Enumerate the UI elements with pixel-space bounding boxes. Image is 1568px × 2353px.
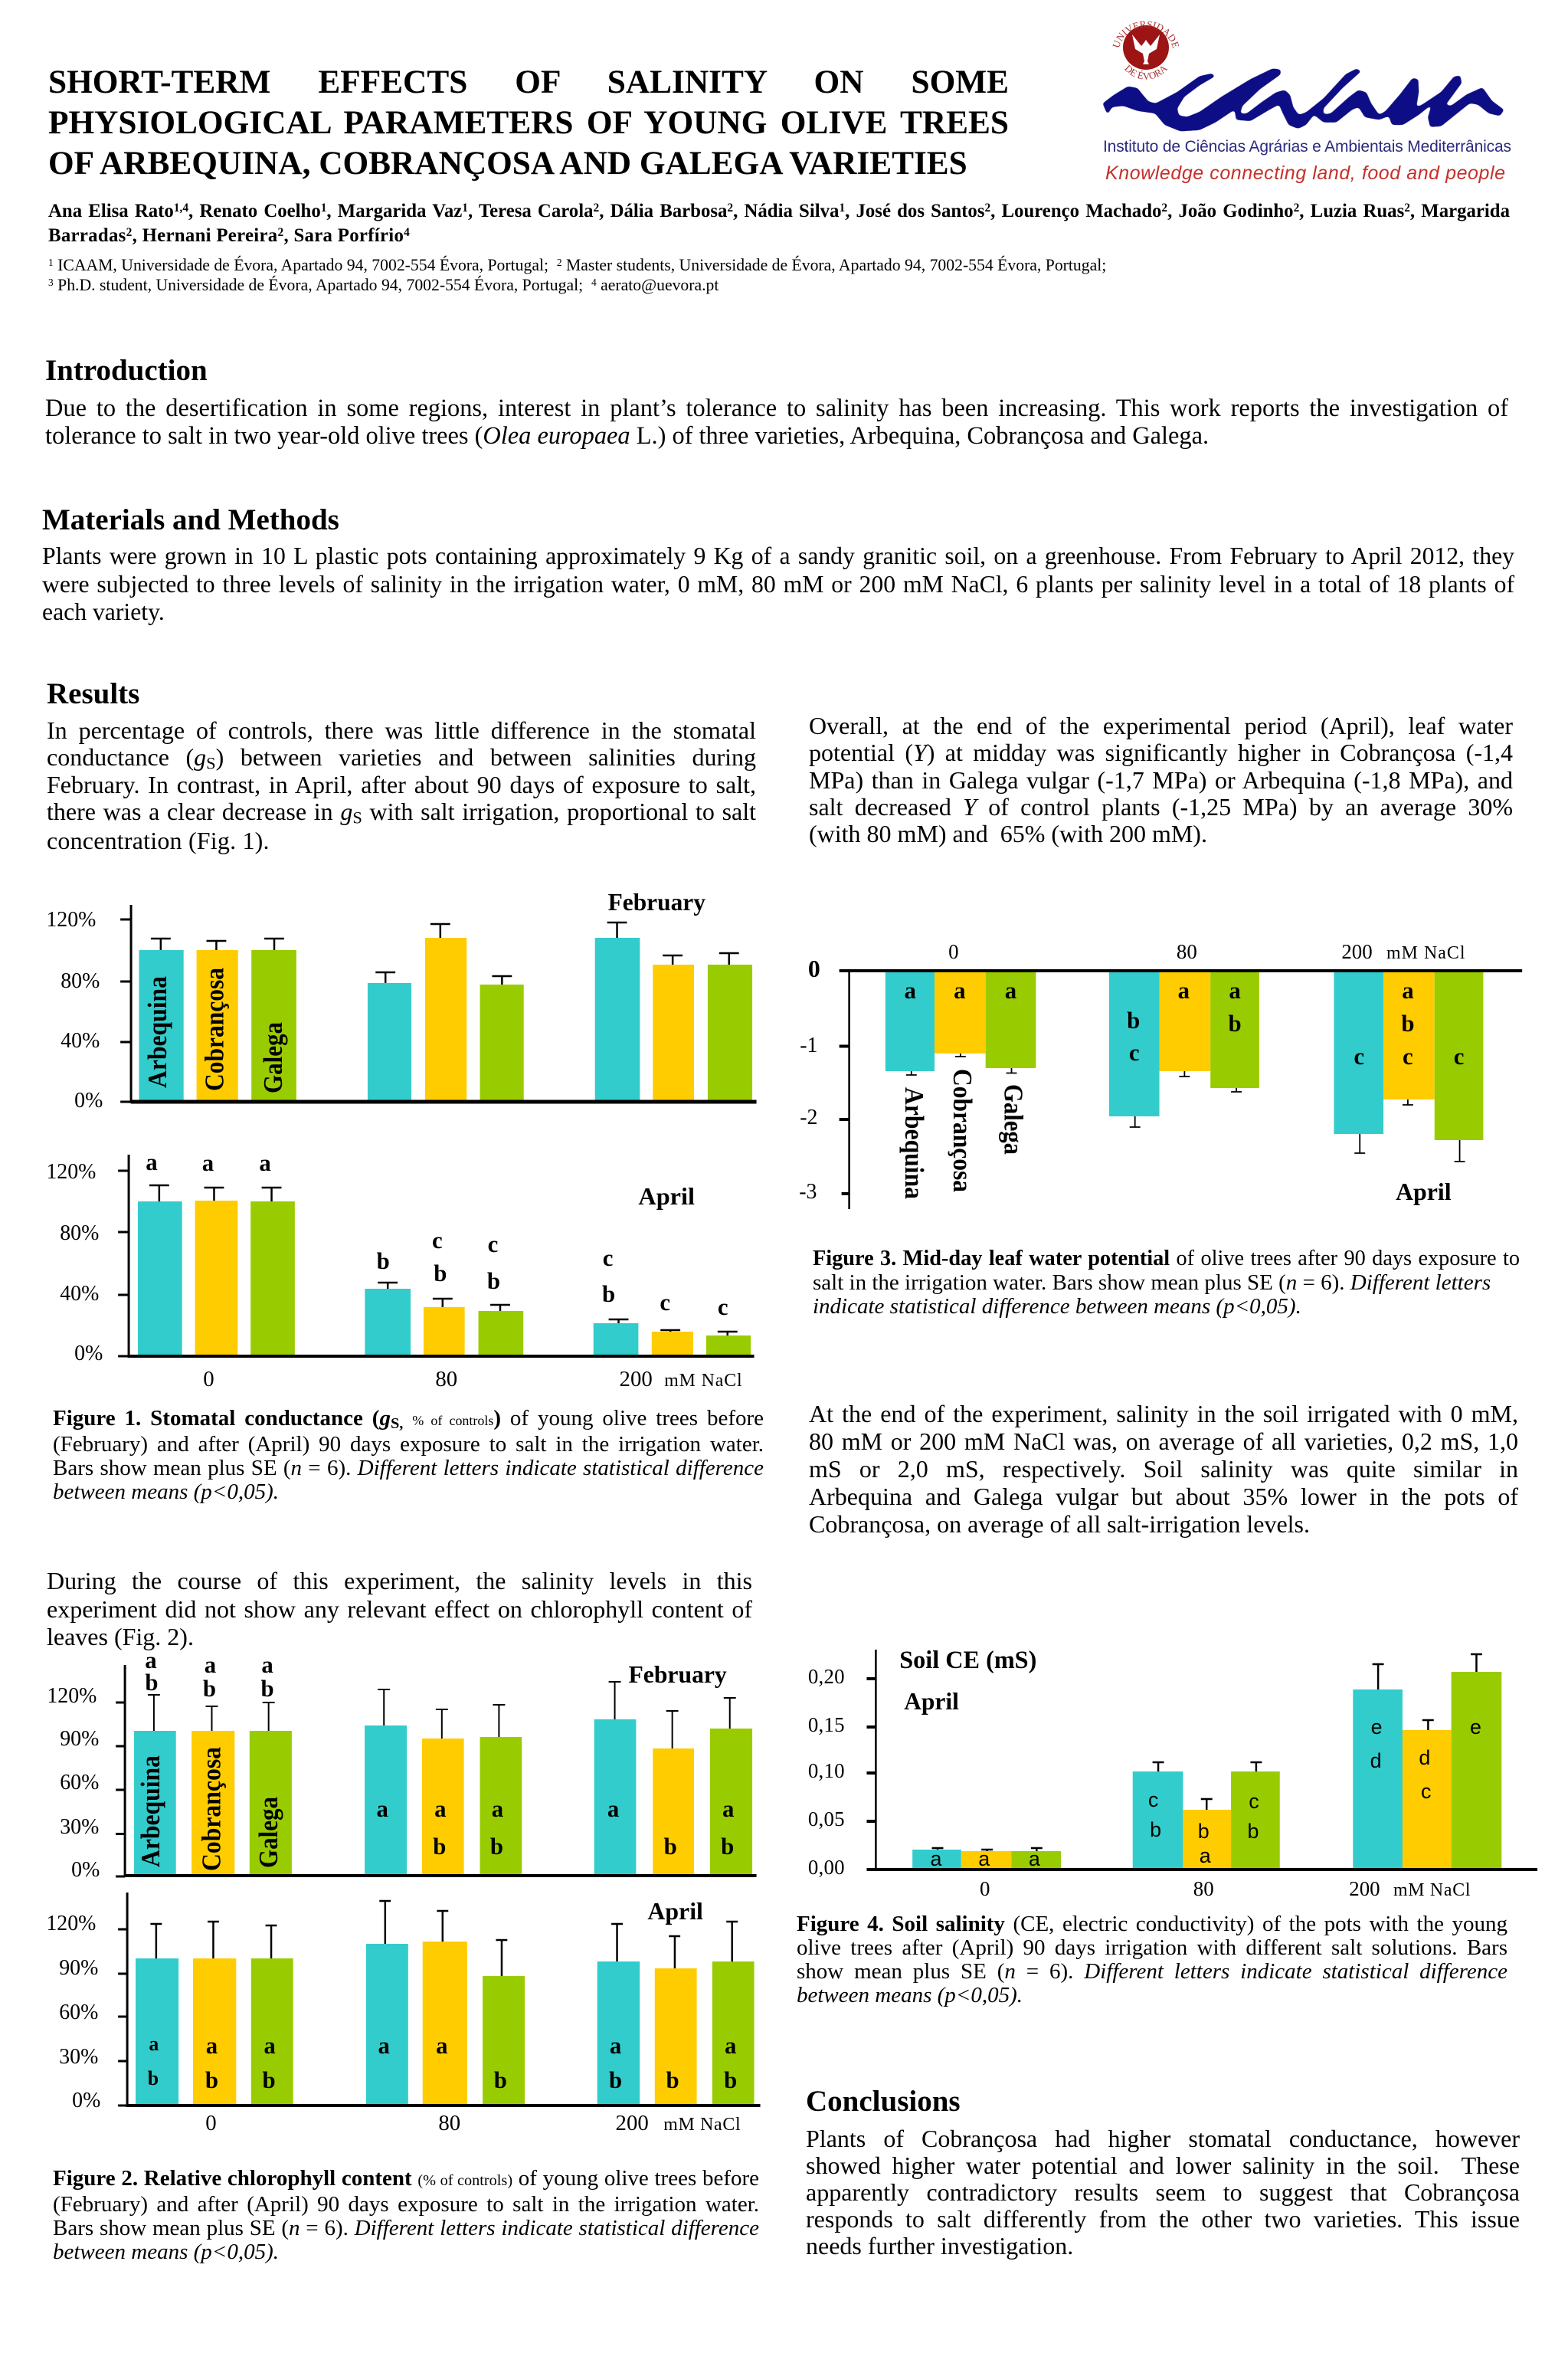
x axis labels: 200 — [1341, 940, 1373, 963]
significance letters — [146, 1149, 728, 1320]
text: soil salinity: At the end of the experiment, salinity in the soil irrigated with 0 mM, — [809, 1400, 1518, 1427]
caption: figure 1: Bars show mean plus SE (n = 6). Different letters indicate statistical difference — [53, 1456, 764, 1480]
caption: figure 1: Figure 1. Stomatal conductance (gS, % of controls) of young olive trees before — [53, 1406, 764, 1432]
logo: ICAAM and Universidade de Évora — [1102, 18, 1511, 184]
text: materials and methods — [42, 542, 1515, 625]
significance letters: c — [1148, 1788, 1158, 1811]
y axis labels: 60% — [59, 2001, 98, 2024]
month label: April — [1396, 1178, 1452, 1205]
icon: icaam wordmark — [1102, 68, 1504, 131]
x axis labels: mM NaCl — [663, 2115, 741, 2135]
y axis labels: 0 — [808, 955, 820, 982]
text: results stomatal conductance: there was a clear decrease in gS with salt irrigation, proportional to salt — [47, 798, 756, 827]
significance letters: b — [1228, 1010, 1242, 1037]
y axis labels: 40% — [61, 1029, 100, 1053]
y axis labels: 0% — [71, 1858, 100, 1882]
text: results water potential: salt decreased Y of control plants (-1,25 MPa) by an average 30% — [809, 793, 1513, 821]
text: conclusions: apparently contradictory results seem to suggest that Cobrançosa — [806, 2178, 1520, 2206]
significance letters: c — [1249, 1790, 1259, 1813]
x axis labels: 80 — [1193, 1877, 1214, 1900]
x axis labels: 200 — [616, 2111, 649, 2135]
heading: conclusions: Conclusions — [806, 2085, 961, 2118]
bars — [134, 1719, 752, 1874]
significance letters: b — [145, 1669, 158, 1696]
x axis labels — [203, 1367, 742, 1391]
text: materials and methods: were subjected to three levels of salinity in the irrigation water, 0 mM, 80 mM or 200 mM NaCl, 6 plants per salinity level in a total of 18 plants of — [42, 570, 1514, 598]
variety labels: Cobrançosa — [196, 1747, 226, 1871]
axes — [120, 905, 131, 1103]
y axis labels — [799, 955, 820, 1204]
x axis labels: 0 — [980, 1877, 990, 1900]
x axis labels — [948, 940, 1465, 963]
significance letters: b — [721, 1833, 734, 1860]
y axis labels — [47, 1684, 100, 1882]
significance letters: b — [205, 2066, 218, 2093]
month label: April — [638, 1183, 695, 1210]
text: materials and methods: Plants were grown in 10 L plastic pots containing approximately 9 Kg of a sandy granitic soil, on a greenhouse. From February to April 2012, they — [42, 542, 1514, 569]
significance letters: a — [904, 977, 916, 1004]
significance letters: a — [610, 2032, 621, 2059]
chart title: Soil CE (mS) — [899, 1647, 1036, 1674]
caption: figure 1: between means (p<0,05). — [53, 1480, 279, 1504]
significance letters: b — [664, 1833, 677, 1860]
icon: university seal: DE ÉVORA — [1124, 64, 1167, 80]
y axis labels: 0,20 — [808, 1665, 845, 1688]
significance letters: d — [1419, 1746, 1430, 1769]
significance letters: b — [203, 1675, 216, 1702]
authors: Barradas2, Hernani Pereira2, Sara Porfírio4 — [48, 225, 410, 246]
y axis labels: 0,05 — [808, 1807, 845, 1830]
text: results water potential — [809, 712, 1513, 847]
caption: figure 4: olive trees after (April) 90 days irrigation with different salt solutions. Bars — [797, 1935, 1507, 1960]
y axis labels: 120% — [47, 1684, 97, 1708]
significance letters: b — [666, 2066, 679, 2093]
significance letters — [931, 1716, 1481, 1870]
month label: February — [608, 889, 705, 916]
month label: April — [647, 1898, 703, 1925]
y axis labels: 120% — [46, 1160, 96, 1184]
x axis labels: 200 — [1349, 1877, 1380, 1900]
significance letters: b — [1247, 1820, 1259, 1843]
text: results water potential: potential (Y) at midday was significantly higher in Cobrançosa (-1,4 — [809, 739, 1513, 766]
text: results water potential: MPa) than in Galega vulgar (-1,7 MPa) or Arbequina (-1,8 MPa), and — [809, 766, 1513, 794]
y axis labels: 120% — [46, 1912, 96, 1935]
text: introduction — [45, 395, 1509, 450]
significance letters: a — [149, 2033, 159, 2055]
caption: figure 4: Figure 4. Soil salinity (CE, electric conductivity) of the pots with the young — [797, 1912, 1507, 1936]
caption: figure 3 — [813, 1247, 1520, 1319]
significance letters: a — [377, 1795, 388, 1822]
text: results stomatal conductance: concentration (Fig. 1). — [47, 827, 270, 854]
x axis labels: 0 — [948, 940, 959, 963]
significance letters: b — [262, 2066, 276, 2093]
significance letters: a — [1200, 1844, 1211, 1867]
caption: figure 2: Figure 2. Relative chlorophyll content (% of controls) of young olive trees before — [53, 2166, 759, 2191]
caption: figure 3: Figure 3. Mid-day leaf water potential of olive trees after 90 days exposure to — [813, 1247, 1520, 1270]
affiliations: 3 Ph.D. student, Universidade de Évora, Apartado 94, 7002-554 Évora, Portugal; 4 aerato@uevora.pt — [48, 276, 719, 294]
significance letters: b — [494, 2066, 507, 2093]
axes — [118, 1155, 129, 1358]
significance letters: c — [718, 1293, 728, 1320]
significance letters: c — [660, 1289, 670, 1316]
caption: figure 4: show mean plus SE (n = 6). Different letters indicate statistical difference — [797, 1959, 1507, 1984]
significance letters: a — [1029, 1847, 1040, 1870]
x axis labels: 80 — [1177, 940, 1197, 963]
variety labels: Cobrançosa — [199, 968, 229, 1091]
text: results water potential: (with 80 mM) and 65% (with 200 mM). — [809, 820, 1207, 847]
y axis labels — [46, 1160, 103, 1365]
y axis labels: 0,10 — [808, 1759, 845, 1782]
chart: figure 2 April — [46, 1893, 761, 2135]
significance letters: c — [1354, 1043, 1364, 1070]
significance letters: b — [609, 2066, 622, 2093]
y axis labels: 120% — [46, 908, 96, 932]
significance letters: b — [1198, 1820, 1210, 1843]
significance letters: a — [259, 1149, 271, 1176]
caption: figure 3: indicate statistical difference between means (p<0,05). — [813, 1294, 1301, 1319]
chart: figure 2 February — [47, 1647, 757, 1882]
text: tagline: Knowledge connecting land, food and people — [1105, 162, 1505, 184]
significance letters: d — [1370, 1749, 1382, 1772]
text: materials and methods: each variety. — [42, 598, 165, 625]
x axis labels: 0 — [203, 1367, 214, 1391]
y axis labels: 90% — [59, 1956, 98, 1980]
significance letters: c — [1129, 1039, 1140, 1066]
variety labels: Galega — [258, 1022, 288, 1093]
x axis labels: 80 — [435, 1367, 457, 1391]
significance letters: a — [206, 2032, 218, 2059]
significance letters: c — [603, 1244, 613, 1271]
bars — [912, 1672, 1501, 1868]
icon: university seal — [1110, 18, 1182, 82]
title: OF ARBEQUINA, COBRANÇOSA AND GALEGA VARIETIES — [48, 145, 967, 182]
significance letters: a — [954, 977, 966, 1004]
caption: figure 2 — [53, 2166, 759, 2264]
y axis labels: -2 — [800, 1106, 817, 1129]
text: conclusions — [806, 2125, 1520, 2260]
text: conclusions: needs further investigation. — [806, 2232, 1073, 2260]
y axis labels: 30% — [59, 2045, 98, 2069]
text: soil salinity: mS or 2,0 mS, respectively. Soil salinity was quite similar in — [809, 1455, 1518, 1483]
y axis labels: 90% — [60, 1727, 99, 1751]
text: institute name: Instituto de Ciências Agrárias e Ambientais Mediterrânicas — [1103, 138, 1511, 156]
text: results stomatal conductance: February. In contrast, in April, after about 90 days of exposure to salt, — [47, 771, 756, 798]
significance letters: c — [432, 1227, 443, 1254]
x axis labels: 0 — [205, 2111, 217, 2135]
significance letters — [148, 2032, 737, 2093]
authors: Ana Elisa Rato1,4, Renato Coelho1, Margarida Vaz1, Teresa Carola2, Dália Barbosa2, Nádia Silva1, José dos Santos2, Lourenço Machado2, João Godinho2, Luzia Ruas2, Margarida — [48, 201, 1510, 221]
y axis labels: 60% — [60, 1771, 99, 1794]
significance letters: a — [261, 1651, 273, 1678]
significance letters: a — [264, 2032, 276, 2059]
affiliations: 1 ICAAM, Universidade de Évora, Apartado 94, 7002-554 Évora, Portugal; 2 Master students, Universidade de Évora, Apartado 94, 7002-554 Évora, Portugal; — [48, 256, 1106, 274]
text: soil salinity: Cobrançosa, on average of all salt-irrigation levels. — [809, 1510, 1310, 1538]
y axis labels: -1 — [800, 1034, 817, 1057]
heading: introduction: Introduction — [45, 354, 208, 387]
y axis labels: 80% — [60, 1221, 99, 1245]
text: soil salinity: 80 mM or 200 mM NaCl was, on average of all varieties, 0,2 mS, 1,0 — [809, 1427, 1518, 1455]
chart: figure 1 February — [46, 889, 757, 1113]
text: soil salinity: Arbequina and Galega vulgar but about 35% lower in the pots of — [809, 1483, 1518, 1510]
error bars — [906, 1054, 1465, 1162]
month label: April — [904, 1688, 959, 1715]
x axis labels: 200 — [620, 1367, 653, 1391]
variety labels — [899, 1069, 1028, 1199]
variety labels: Arbequina — [142, 976, 172, 1088]
text: chlorophyll: experiment did not show any relevant effect on chlorophyll content of — [47, 1595, 752, 1623]
text: chlorophyll: During the course of this experiment, the salinity levels in this — [47, 1567, 752, 1594]
significance letters: a — [492, 1795, 503, 1822]
significance letters: b — [724, 2066, 737, 2093]
y axis labels — [46, 1912, 100, 2112]
significance letters: a — [378, 2032, 390, 2059]
significance letters: a — [434, 1795, 447, 1822]
text: conclusions: showed higher water potential and lower salinity in the soil. These — [806, 2151, 1520, 2179]
y axis labels: 0,15 — [808, 1713, 845, 1736]
variety labels: Arbequina — [136, 1755, 165, 1867]
error bars — [148, 1682, 736, 1748]
text: chlorophyll — [47, 1567, 752, 1650]
significance letters: a — [202, 1149, 214, 1176]
significance letters: a — [725, 2032, 736, 2059]
affiliations — [48, 256, 1106, 294]
text: soil salinity — [809, 1400, 1518, 1538]
significance letters: b — [434, 1260, 447, 1286]
axes — [118, 1893, 127, 2107]
significance letters: b — [602, 1280, 615, 1307]
title — [48, 64, 1009, 182]
text: chlorophyll: leaves (Fig. 2). — [47, 1623, 194, 1650]
significance letters: a — [1229, 977, 1241, 1004]
text: conclusions: responds to salt differently from the other two varieties. This issue — [806, 2205, 1520, 2233]
y axis labels: 40% — [60, 1282, 99, 1306]
axes — [875, 1650, 877, 1871]
variety labels — [136, 1747, 283, 1871]
text: results stomatal conductance — [47, 716, 756, 854]
x axis labels — [980, 1877, 1471, 1900]
error bars — [151, 923, 739, 985]
axes — [848, 971, 850, 1209]
significance letters: a — [607, 1795, 619, 1822]
text: conclusions: Plants of Cobrançosa had higher stomatal conductance, however — [806, 2125, 1520, 2152]
title: PHYSIOLOGICAL PARAMETERS OF YOUNG OLIVE TREES — [48, 104, 1009, 141]
significance letters: a — [978, 1847, 990, 1870]
caption: figure 1 — [53, 1406, 764, 1504]
chart: figure 3 water potential — [799, 940, 1522, 1209]
title: SHORT-TERM EFFECTS OF SALINITY ON SOME — [48, 64, 1009, 100]
significance letters: b — [1401, 1010, 1414, 1037]
significance letters — [904, 977, 1464, 1070]
variety labels — [142, 968, 288, 1093]
x axis labels — [205, 2111, 741, 2135]
variety labels: Cobrançosa — [948, 1069, 977, 1192]
significance letters: c — [1421, 1780, 1432, 1803]
bars — [136, 1942, 755, 2104]
y axis labels: 80% — [61, 969, 100, 993]
significance letters: c — [1454, 1043, 1464, 1070]
significance letters: a — [1005, 977, 1016, 1004]
authors — [48, 201, 1510, 246]
significance letters: b — [1127, 1007, 1140, 1034]
significance letters: a — [436, 2032, 448, 2059]
y axis labels — [46, 908, 103, 1113]
caption: figure 2: between means (p<0,05). — [53, 2240, 279, 2264]
variety labels: Arbequina — [899, 1087, 929, 1199]
text: introduction: tolerance to salt in two year-old olive trees (Olea europaea L.) of three varieties, Arbequina, Cobrançosa and Galega. — [45, 422, 1209, 450]
month label: February — [628, 1661, 727, 1688]
y axis labels: -3 — [799, 1180, 817, 1204]
significance letters — [145, 1647, 734, 1860]
significance letters: e — [1470, 1716, 1481, 1739]
caption: figure 2: (February) and after (April) 90 days exposure to salt in the irrigation water. — [53, 2192, 759, 2217]
x axis labels: mM NaCl — [1386, 943, 1465, 963]
error bars — [149, 1185, 738, 1335]
caption: figure 4 — [797, 1912, 1507, 2007]
caption: figure 3: salt in the irrigation water. Bars show mean plus SE (n = 6). Different letters — [813, 1270, 1491, 1295]
bars — [885, 972, 1483, 1140]
y axis labels: 0% — [74, 1342, 103, 1365]
chart: figure 1 April — [46, 1149, 755, 1391]
error bars — [150, 1901, 738, 1976]
heading: results: Results — [47, 677, 139, 710]
significance letters: b — [260, 1675, 274, 1702]
bars — [138, 1201, 751, 1355]
significance letters: b — [148, 2067, 159, 2089]
x axis labels: mM NaCl — [1393, 1880, 1471, 1900]
icon: university seal: UNIVERSIDADE — [1112, 21, 1180, 48]
significance letters: a — [145, 1647, 157, 1673]
caption: figure 1: (February) and after (April) 90 days exposure to salt in the irrigation water. — [53, 1432, 764, 1457]
significance letters: a — [722, 1795, 734, 1822]
text: results stomatal conductance: conductance (gS) between varieties and between salinities during — [47, 743, 756, 773]
significance letters: b — [1150, 1818, 1161, 1841]
y axis labels: 0% — [72, 2089, 100, 2112]
significance letters: b — [490, 1833, 503, 1860]
significance letters: a — [931, 1847, 941, 1870]
y axis labels: 0% — [74, 1089, 103, 1113]
x axis labels: 80 — [438, 2111, 460, 2135]
caption: figure 2: Bars show mean plus SE (n = 6). Different letters indicate statistical difference — [53, 2216, 759, 2240]
significance letters: b — [433, 1833, 446, 1860]
chart: figure 4 soil salinity — [808, 1647, 1537, 1900]
text: results stomatal conductance: In percentage of controls, there was little difference in the stomatal — [47, 716, 756, 744]
significance letters: a — [1402, 977, 1414, 1004]
significance letters: b — [487, 1267, 500, 1294]
bars — [139, 938, 752, 1100]
error bars — [932, 1654, 1482, 1851]
caption: figure 4: between means (p<0,05). — [797, 1983, 1023, 2007]
significance letters: a — [1178, 977, 1190, 1004]
variety labels: Galega — [254, 1797, 283, 1868]
text: introduction: Due to the desertification in some regions, interest in plant’s tolerance to salinity has been increasing. This work reports the investigation of — [45, 395, 1508, 422]
y axis labels: 30% — [60, 1815, 99, 1839]
significance letters: a — [146, 1149, 158, 1175]
significance letters: a — [205, 1651, 216, 1678]
y axis labels — [808, 1665, 845, 1879]
y axis labels: 0,00 — [808, 1856, 845, 1879]
axes — [116, 1665, 125, 1877]
significance letters: b — [377, 1247, 390, 1274]
significance letters: c — [488, 1231, 498, 1257]
variety labels: Galega — [999, 1084, 1028, 1155]
significance letters: e — [1371, 1716, 1383, 1739]
text: results water potential: Overall, at the end of the experimental period (April), leaf water — [809, 712, 1513, 739]
heading: materials and methods: Materials and Methods — [42, 503, 339, 536]
x axis labels: mM NaCl — [664, 1371, 742, 1391]
significance letters: c — [1403, 1043, 1413, 1070]
